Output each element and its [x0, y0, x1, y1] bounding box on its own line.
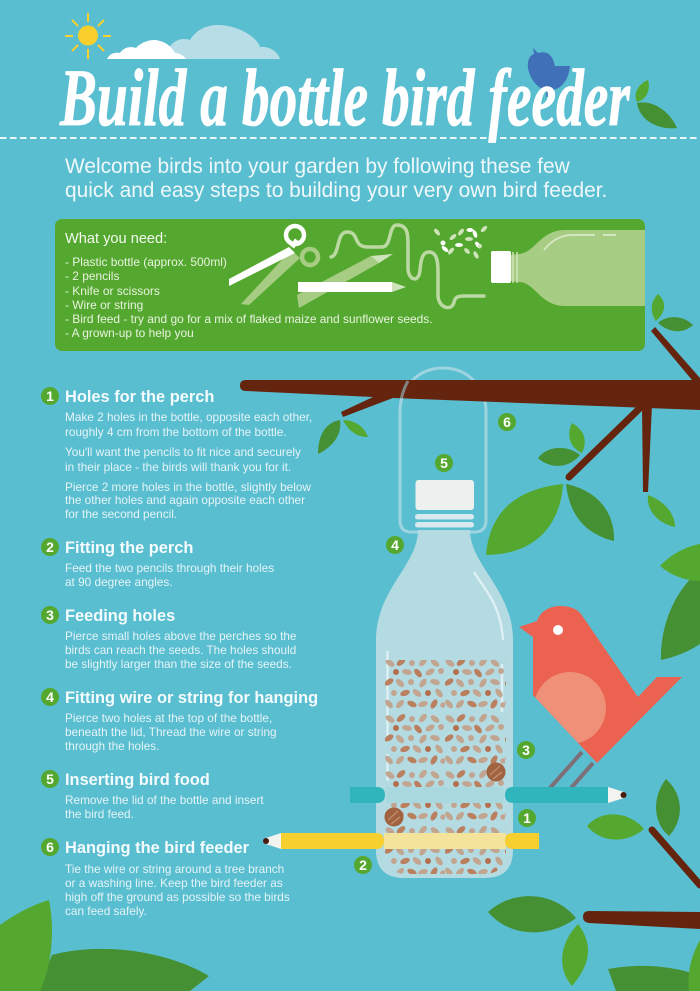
intro text: quick and easy steps to building your very own bird feeder. [65, 179, 607, 202]
wire loop [400, 368, 486, 532]
materials list: - Wire or string [65, 298, 143, 312]
body text 6 [65, 862, 290, 918]
body text 6: Tie the wire or string around a tree branch [65, 862, 284, 876]
materials list: - Knife or scissors [65, 284, 160, 298]
badge 5 [41, 770, 59, 788]
body text 5: Remove the lid of the bottle and insert [65, 793, 264, 807]
body text 5: the bird feed. [65, 807, 134, 821]
body text 2: at 90 degree angles. [65, 575, 173, 589]
leaves: lower right [488, 779, 700, 991]
branch: lower right [583, 830, 700, 929]
bottle cap [416, 480, 474, 510]
body text 6: can feed safely. [65, 904, 147, 918]
step 1 [41, 387, 312, 521]
icon: wire [331, 225, 484, 308]
bottle body [376, 530, 513, 878]
body text 3 [65, 629, 297, 671]
leaves on upper branches [318, 294, 693, 555]
step 4 [41, 688, 318, 753]
panel: what you need [55, 219, 645, 351]
bird body [519, 606, 682, 763]
body text 6: or a washing line. Keep the bird feeder as [65, 876, 283, 890]
bottle highlights [388, 572, 503, 781]
materials list: - Bird feed - try and go for a mix of flaked maize and sunflower seeds. [65, 312, 433, 326]
diagram number 3 [517, 741, 535, 759]
seed nut right [486, 762, 506, 782]
badge 1 [41, 387, 59, 405]
body text 1: Make 2 holes in the bottle, opposite each other, [65, 410, 312, 424]
wire over branch [400, 381, 408, 412]
badge 4: 4 [46, 689, 54, 705]
seeds upper [385, 660, 506, 787]
dashed divider [0, 137, 700, 139]
materials list [65, 255, 433, 340]
main branch [240, 327, 700, 492]
diagram number 4 [386, 536, 404, 554]
body text 1: You'll want the pencils to fit nice and securely [65, 445, 301, 459]
materials list: - 2 pencils [65, 269, 119, 283]
body text 4 [65, 711, 277, 753]
icon: pencils [297, 254, 406, 308]
diagram number 4: 4 [391, 537, 399, 553]
body text 3: birds can reach the seeds. The holes should [65, 643, 296, 657]
bird [519, 606, 682, 788]
heading: hanging the bird feeder: Hanging the bird feeder [65, 839, 250, 857]
seeds lower [385, 803, 506, 874]
body text 1: Pierce 2 more holes in the bottle, slightly below [65, 480, 311, 494]
icon: clouds [107, 25, 280, 59]
badge 5: 5 [46, 771, 54, 787]
step 6 [41, 838, 290, 918]
seed nut left [384, 808, 404, 826]
diagram number 2 [354, 856, 372, 874]
icon: title leaves [636, 80, 677, 128]
badge 3: 3 [46, 607, 54, 623]
badge 6: 6 [46, 839, 54, 855]
body text 4: Pierce two holes at the top of the bottle, [65, 711, 272, 725]
badge 4 [41, 688, 59, 706]
diagram number 6 [498, 413, 516, 431]
body text 1 [65, 410, 312, 521]
intro text: Welcome birds into your garden by following these few [65, 155, 571, 178]
leaves: right side [660, 544, 700, 660]
badge 2: 2 [46, 539, 54, 555]
diagram number 1: 1 [523, 810, 531, 826]
body text 6: high off the ground as possible so the birds [65, 890, 290, 904]
bottle neck rings [415, 514, 474, 528]
badge 2 [41, 538, 59, 556]
icon: scissors [229, 226, 318, 305]
bird legs [550, 752, 593, 788]
diagram number 5 [435, 454, 453, 472]
step 5 [41, 770, 264, 821]
step 3 [41, 606, 297, 671]
body text 4: beneath the lid, Thread the wire or string [65, 725, 277, 739]
diagram number 3: 3 [522, 742, 530, 758]
icon: sideways bottle [491, 230, 645, 306]
body text 1: for the second pencil. [65, 507, 177, 521]
body text 1: the other holes and again opposite each other [65, 493, 305, 507]
materials list: - Plastic bottle (approx. 500ml) [65, 255, 227, 269]
bird wing [534, 672, 606, 744]
heading: holes for the perch: Holes for the perch [65, 388, 214, 406]
badge 1: 1 [46, 388, 54, 404]
diagram number 1 [518, 809, 536, 827]
body text 3: Pierce small holes above the perches so the [65, 629, 297, 643]
diagram number 6: 6 [503, 414, 511, 430]
heading: what you need: What you need: [65, 231, 167, 247]
leaves: bottom left [0, 900, 209, 991]
badge 3 [41, 606, 59, 624]
body text 3: be slightly larger than the size of the seeds. [65, 657, 292, 671]
heading: inserting bird food: Inserting bird food [65, 771, 210, 789]
icon: seeds [433, 225, 488, 259]
diagram number 5: 5 [440, 455, 448, 471]
yellow pencil [263, 833, 539, 849]
body text 2 [65, 561, 274, 589]
diagram number 2: 2 [359, 857, 367, 873]
body text 2: Feed the two pencils through their holes [65, 561, 274, 575]
heading: fitting the perch: Fitting the perch [65, 539, 193, 557]
heading: fitting wire: Fitting wire or string for hanging [65, 689, 318, 707]
bird eye [553, 625, 563, 635]
step 2 [41, 538, 274, 589]
materials list: - A grown-up to help you [65, 326, 194, 340]
body text 1: in their place - the birds will thank you for it. [65, 460, 291, 474]
body text 5 [65, 793, 264, 821]
badge 6 [41, 838, 59, 856]
bottle with seeds [376, 480, 513, 878]
icon: sun [65, 13, 111, 59]
teal pencil [350, 787, 626, 803]
body text 4: through the holes. [65, 739, 159, 753]
heading: feeding holes: Feeding holes [65, 607, 175, 625]
icon: blue bird [528, 48, 570, 97]
body text 1: roughly 4 cm from the bottom of the bottle. [65, 425, 287, 439]
intro text [65, 155, 607, 202]
